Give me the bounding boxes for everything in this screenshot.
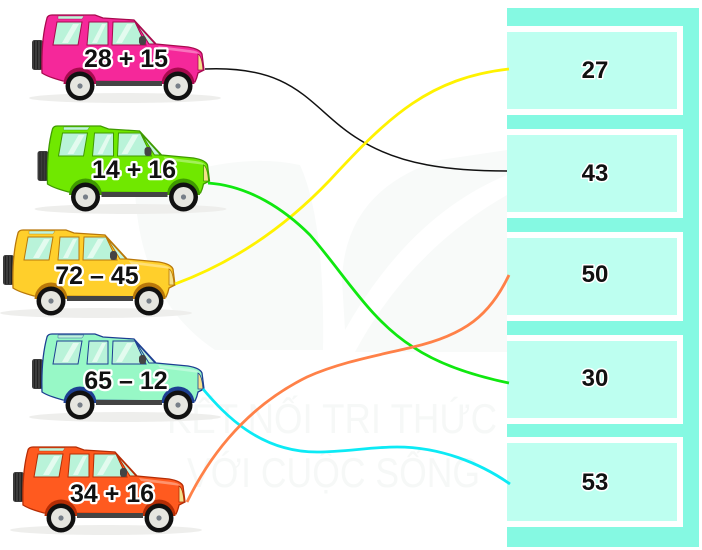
car: green 14 + 16 xyxy=(34,126,226,214)
answer box 30: 30 xyxy=(582,365,608,392)
car: yellow 72 – 45: 72 – 45 xyxy=(55,262,139,290)
panel: answers column xyxy=(507,8,699,547)
answer box 27: 27 xyxy=(582,57,608,84)
car: pink 28 + 15 xyxy=(29,15,221,103)
answer box 53: 53 xyxy=(582,469,608,496)
car: pink 28 + 15: 28 + 15 xyxy=(84,45,168,73)
answer box 27 xyxy=(507,29,680,112)
answer box 53 xyxy=(507,440,680,524)
car: yellow 72 – 45 xyxy=(0,230,192,318)
car: green 14 + 16: 14 + 16 xyxy=(92,156,176,184)
car: mint 65 – 12: 65 – 12 xyxy=(84,367,168,395)
car: orange 34 + 16 xyxy=(10,447,202,535)
watermark: logo and publisher text xyxy=(135,150,507,496)
answer box 50 xyxy=(507,235,680,318)
connector: 14 + 16 to 30 xyxy=(208,183,509,383)
connector: 28 + 15 to 43 xyxy=(205,69,507,171)
car: orange 34 + 16: 34 + 16 xyxy=(70,480,154,508)
answer box 43: 43 xyxy=(582,160,608,187)
connector: 34 + 16 to 50 xyxy=(187,275,509,502)
connector: 72 – 45 to 27 xyxy=(175,69,509,284)
watermark: logo and publisher text: KẾT NỐI TRI THỨC xyxy=(167,394,497,442)
answer box 43 xyxy=(507,132,680,215)
connector: 65 – 12 to 53 xyxy=(203,389,510,484)
watermark: logo and publisher text: VỚI CUỘC SỐNG xyxy=(187,448,480,496)
answer box 30 xyxy=(507,338,680,421)
car: mint 65 – 12 xyxy=(29,334,221,422)
answer box 50: 50 xyxy=(582,261,608,288)
